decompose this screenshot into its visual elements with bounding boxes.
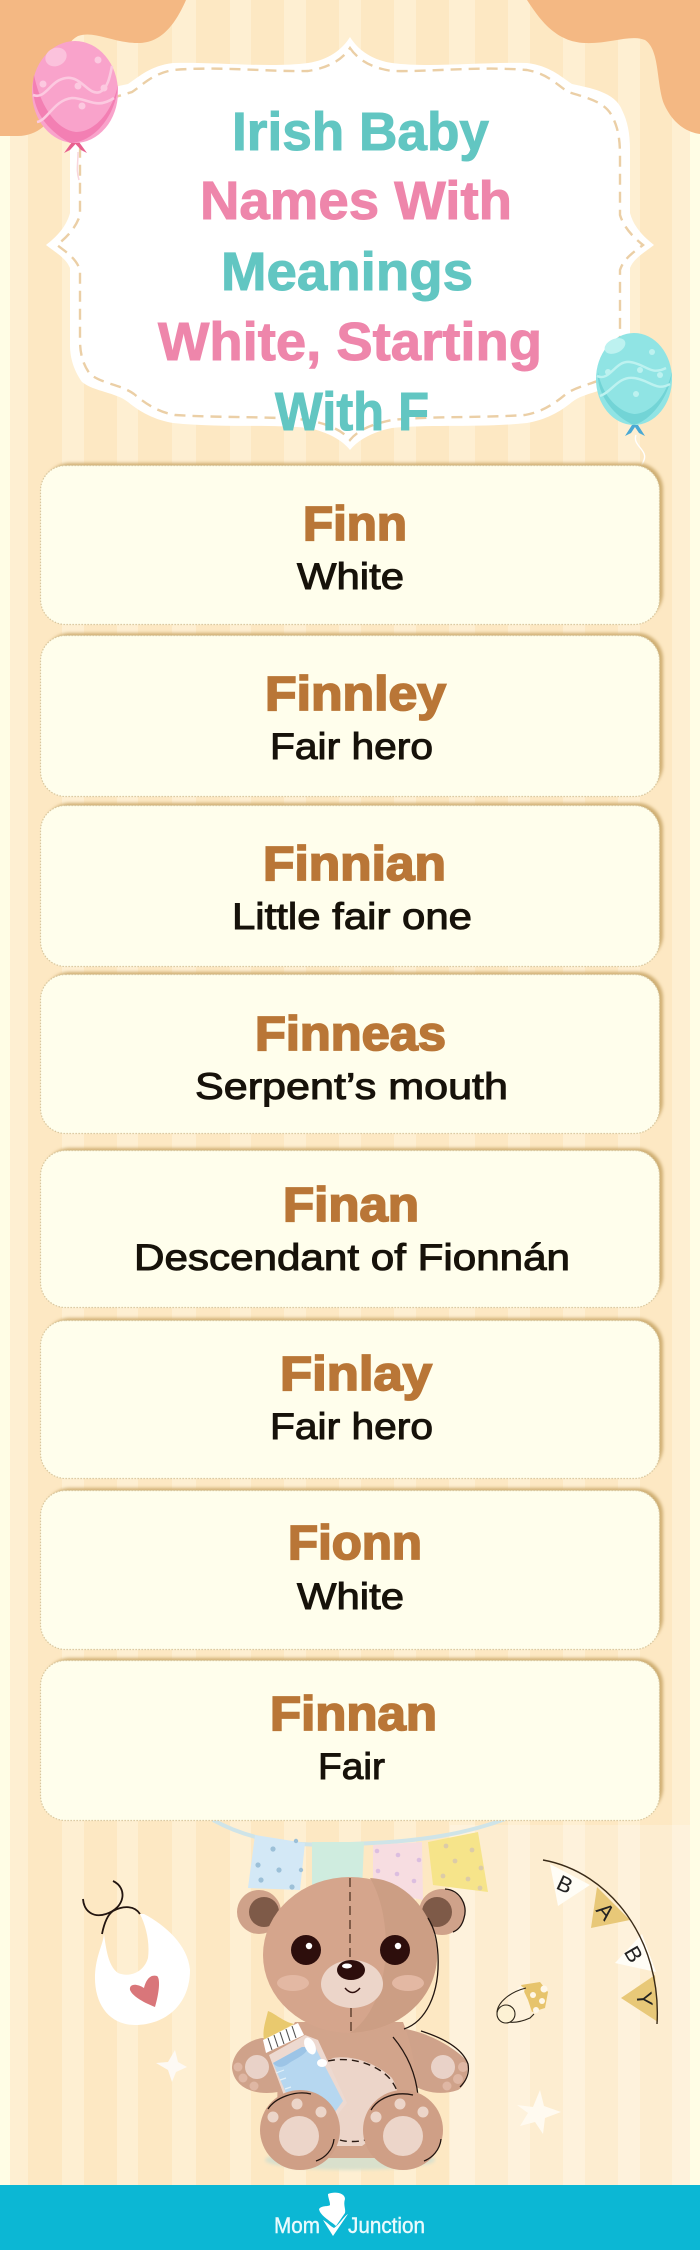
- right arm: [395, 2028, 468, 2093]
- title: White, Starting: [158, 312, 542, 372]
- title: Names With: [200, 171, 512, 231]
- panel: Finnley: [40, 633, 663, 796]
- ears: [237, 1889, 465, 1935]
- top right orange drape: [527, 0, 700, 134]
- icon: right star: [517, 2090, 561, 2134]
- icon: left star: [156, 2050, 187, 2082]
- belly: [308, 2037, 418, 2146]
- panel: Finlay: Finlay: [280, 1348, 432, 1401]
- icon: pink balloon: [32, 41, 118, 180]
- panel: Finn: Finn: [303, 498, 407, 551]
- panel: Finneas: Finneas: [255, 1008, 446, 1061]
- panel: Finnan: Fair: [318, 1746, 385, 1787]
- icon: BABY banner: B: [619, 1942, 648, 1967]
- baby bottle: [263, 2011, 347, 2125]
- right foot: [363, 2090, 443, 2170]
- head: [263, 1877, 437, 2033]
- panel: Finnian: [40, 803, 663, 966]
- panel: Finnian: Finnian: [263, 838, 446, 891]
- left foot: [260, 2090, 340, 2170]
- footer logo: Junction: [348, 2213, 425, 2238]
- icon: blue balloon: [596, 333, 672, 472]
- footer logo: [274, 2193, 425, 2238]
- panel: Finneas: [40, 972, 663, 1134]
- panel: Finnley: Finnley: [265, 668, 446, 721]
- illustration: teddy bear: [232, 1877, 468, 2170]
- panel: Finn: White: [297, 556, 404, 597]
- panel: Finan: Descendant of Fionnán: [134, 1237, 570, 1278]
- icon: safety pin: [497, 1982, 548, 2023]
- cheeks: [277, 1975, 309, 1991]
- title: With F: [275, 382, 429, 442]
- title: [158, 102, 542, 442]
- footer logo: Mom: [274, 2213, 320, 2238]
- panel: Finan: Finan: [283, 1179, 419, 1232]
- panel: Finlay: Fair hero: [270, 1406, 433, 1447]
- eyes: [291, 1935, 410, 1965]
- muzzle: [321, 1960, 383, 2008]
- nose and mouth: [337, 1960, 365, 1992]
- title: Meanings: [221, 242, 473, 302]
- panel: Finnian: Little fair one: [232, 896, 472, 937]
- panel: Finnley: Fair hero: [270, 726, 433, 767]
- bunting: [213, 1814, 518, 1900]
- top left orange drape: [0, 0, 186, 136]
- title: Irish Baby: [232, 102, 489, 162]
- panel: Finnan: [40, 1658, 663, 1820]
- title plaque: [46, 37, 654, 450]
- panel: Finlay: [40, 1318, 663, 1478]
- panel: Finnan: Finnan: [270, 1688, 437, 1741]
- left arm: [232, 2038, 298, 2093]
- icon: BABY banner: [543, 1860, 658, 2024]
- icon: BABY banner: B: [553, 1870, 577, 1899]
- icon: BABY banner: A: [591, 1898, 620, 1925]
- icon: BABY banner: Y: [631, 1991, 658, 2008]
- ground shadow: [265, 2150, 435, 2170]
- panel: Finn: [40, 463, 663, 624]
- panel: Finneas: Serpent’s mouth: [195, 1066, 508, 1107]
- torso: [277, 2022, 417, 2158]
- panel: Finan: [40, 1148, 663, 1308]
- panel: Fionn: White: [297, 1576, 404, 1617]
- icon: baby bib: [83, 1881, 190, 2025]
- panel: Fionn: [40, 1488, 663, 1650]
- panel: Fionn: Fionn: [288, 1517, 422, 1570]
- footer bar: [0, 2185, 700, 2250]
